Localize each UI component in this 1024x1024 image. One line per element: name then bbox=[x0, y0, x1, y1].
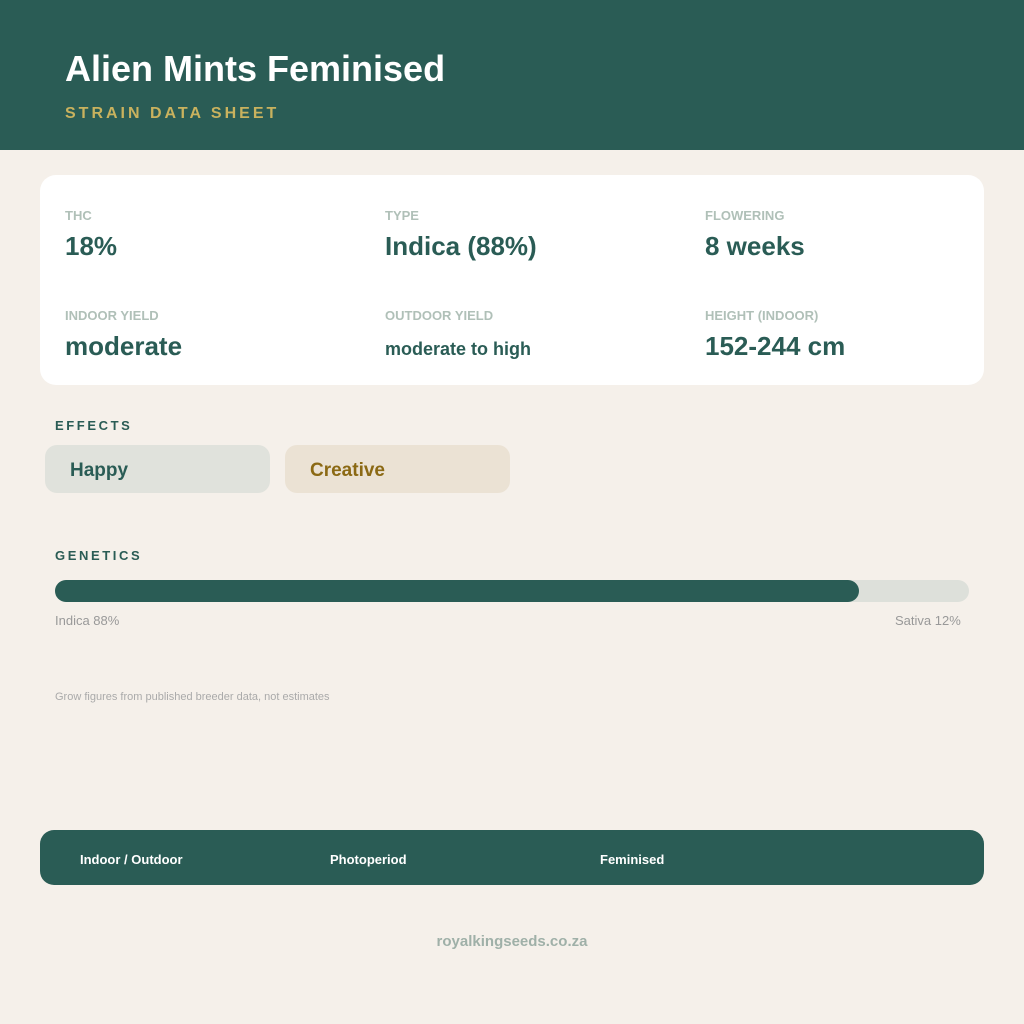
effect tag: creative bbox=[285, 445, 510, 493]
stat: flowering: 8 weeks bbox=[705, 231, 805, 261]
label: indica share: Indica 88% bbox=[55, 613, 119, 628]
website: royalkingseeds.co.za bbox=[437, 933, 587, 950]
effect tag: creative: Creative bbox=[310, 460, 385, 481]
stat: indoor yield bbox=[65, 308, 182, 361]
stat: type bbox=[385, 208, 537, 261]
attribute: environment: Indoor / Outdoor bbox=[80, 852, 183, 867]
label: sativa share: Sativa 12% bbox=[895, 613, 961, 628]
effect tag: happy bbox=[45, 445, 270, 493]
stat: indoor height bbox=[705, 308, 845, 361]
stat: indoor yield: moderate bbox=[65, 331, 182, 361]
source note: Grow figures from published breeder data, not estimates bbox=[55, 691, 330, 703]
stat: outdoor yield bbox=[385, 308, 531, 359]
indica bar 88% bbox=[55, 580, 859, 602]
panel: strain stats bbox=[40, 175, 984, 385]
header banner bbox=[0, 0, 1024, 150]
stat: indoor height: 152-244 cm bbox=[705, 331, 845, 361]
title: Alien Mints Feminised bbox=[65, 48, 445, 89]
stat: outdoor yield: moderate to high bbox=[385, 339, 531, 359]
stat: outdoor yield: OUTDOOR YIELD bbox=[385, 308, 493, 323]
stat: flowering bbox=[705, 208, 805, 261]
attribute: feminised: Feminised bbox=[600, 852, 664, 867]
heading: genetics: GENETICS bbox=[55, 548, 142, 563]
stat: indoor height: HEIGHT (INDOOR) bbox=[705, 308, 818, 323]
subtitle: STRAIN DATA SHEET bbox=[65, 105, 279, 122]
stat: type: Indica (88%) bbox=[385, 231, 537, 261]
stat: THC: THC bbox=[65, 208, 92, 223]
stat: flowering: FLOWERING bbox=[705, 208, 784, 223]
heading: effects: EFFECTS bbox=[55, 418, 132, 433]
stat: THC: 18% bbox=[65, 231, 117, 261]
stat: THC bbox=[65, 208, 117, 261]
attribute: photoperiod: Photoperiod bbox=[330, 852, 407, 867]
stat: type: TYPE bbox=[385, 208, 419, 223]
stat: indoor yield: INDOOR YIELD bbox=[65, 308, 159, 323]
genetics bar chart bbox=[55, 580, 969, 602]
footer strip: grow attributes bbox=[40, 830, 984, 885]
effect tag: happy: Happy bbox=[70, 460, 128, 481]
